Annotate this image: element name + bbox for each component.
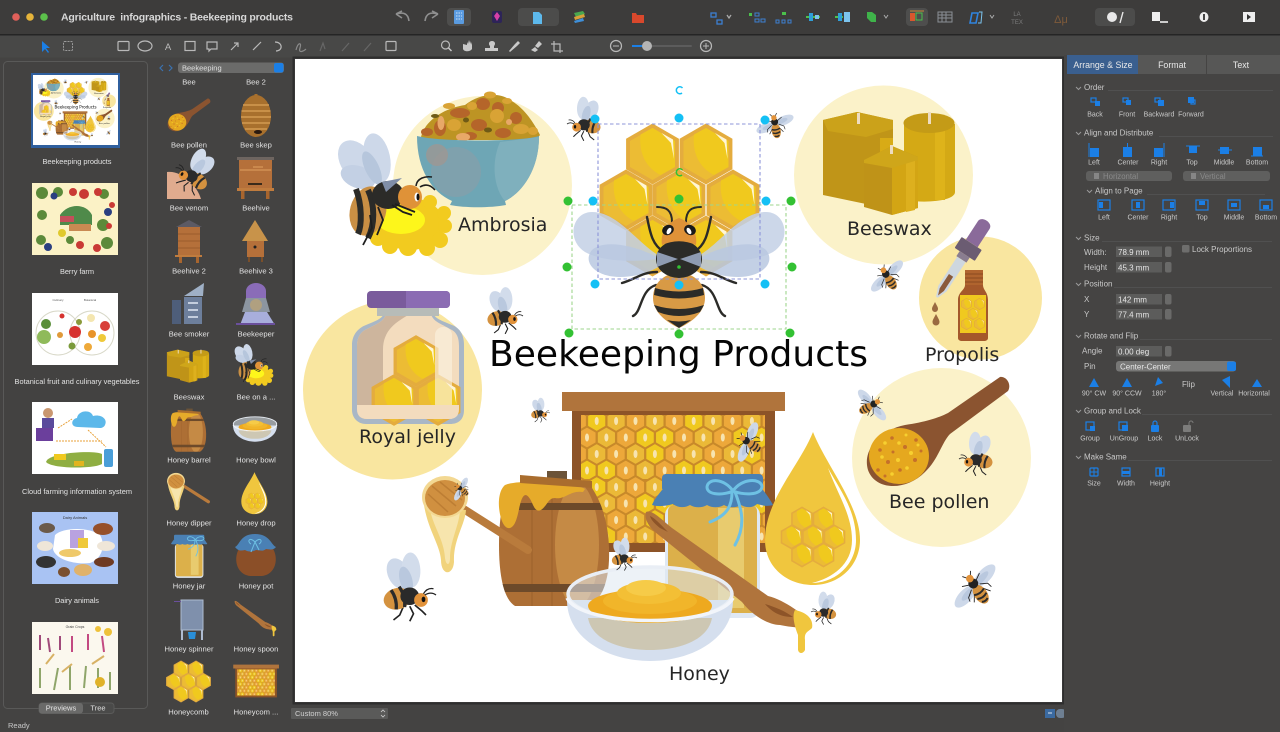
- section: size: 45.3 mm: [1118, 264, 1149, 272]
- library item: honeycomb: [166, 660, 211, 716]
- traffic lights: [12, 13, 48, 21]
- section: position: X: [1084, 295, 1090, 304]
- section: align to page: Middle: [1224, 214, 1244, 222]
- honey jar: [652, 474, 773, 618]
- library item: bee pollen: [168, 98, 210, 150]
- bee: bottom right: [943, 557, 1011, 619]
- section: size: Width:: [1084, 248, 1107, 257]
- label: propolis: Propolis: [925, 344, 999, 366]
- library item: bee on a flower: Bee on a ...: [237, 392, 275, 402]
- section: align and distribute: Vertical: [1200, 172, 1226, 181]
- section: position: Y: [1084, 310, 1090, 319]
- library item: beeswax: Beeswax: [174, 392, 205, 402]
- canvas page: [295, 59, 1062, 702]
- library item: honey spoon: [234, 601, 278, 654]
- library item: honey jar: Honey jar: [173, 582, 206, 590]
- label: honey: Honey: [669, 663, 730, 685]
- previews and tree tabs: Previews: [46, 704, 76, 712]
- section: rotate and flip: 180°: [1152, 390, 1166, 398]
- preview: botanical fruit: Culinary: [52, 298, 64, 302]
- section: align to page: Right: [1161, 214, 1177, 222]
- library item: bee venom: [167, 141, 222, 212]
- honey barrel: [495, 471, 615, 607]
- body: [344, 177, 435, 245]
- section: size: 78.9 mm: [1118, 248, 1149, 257]
- section: position: 77.4 mm: [1118, 310, 1149, 320]
- previews and tree tabs: [39, 703, 114, 714]
- propolis dropper: [927, 214, 997, 304]
- preview: cloud farming: [22, 402, 132, 496]
- section: align to page: Left: [1098, 214, 1110, 222]
- section: order: Order: [1084, 83, 1105, 92]
- section: rotate and flip: Center-Center: [1120, 362, 1171, 371]
- library item: honeycomb: Honeycomb: [168, 708, 209, 716]
- library item: bee smoker: [169, 283, 210, 338]
- library item: honey drop: Honey drop: [236, 518, 276, 528]
- shape tools: A: [165, 42, 172, 53]
- honey bowl: [567, 567, 733, 661]
- circle: ambrosia: [393, 96, 572, 275]
- big honeycomb: [600, 124, 759, 276]
- section: make same: Width: [1117, 480, 1135, 488]
- preview: beekeeping products: [31, 73, 120, 166]
- circle: royal jelly: [303, 300, 482, 480]
- bee: near spoon: [811, 591, 837, 625]
- bee: above pollen circle: [849, 382, 891, 430]
- circle: beeswax: [794, 86, 973, 264]
- library item: bee smoker: Bee smoker: [169, 330, 210, 338]
- toolbar icons: layers, grid, link, latex, formula: LA: [1013, 12, 1021, 18]
- propolis bottle: [958, 270, 988, 341]
- section: position: [1076, 280, 1272, 320]
- library item: bee venom: Bee venom: [170, 204, 208, 212]
- section: rotate and flip: Horizontal: [1238, 390, 1270, 398]
- section: align to page: Top: [1196, 214, 1208, 222]
- bee: over bowl: [611, 537, 637, 571]
- bee: on dipper: [447, 475, 476, 505]
- section: rotate and flip: Vertical: [1211, 390, 1234, 398]
- view tools: [442, 40, 563, 53]
- bee on a flower: [330, 131, 452, 256]
- label: beeswax: Beeswax: [847, 218, 932, 240]
- toolbar icons: layers, grid, link, latex, formula: TEX: [1011, 20, 1023, 26]
- toolbar icons: layers, grid, link, latex, formula: Δμ: [1054, 14, 1068, 26]
- library header: Beekeeping: [182, 64, 222, 72]
- queen bee: [573, 207, 785, 328]
- green selection box: [572, 205, 786, 329]
- section: align and distribute: [1076, 128, 1273, 181]
- section: make same: [1076, 452, 1272, 488]
- section: align and distribute: Top: [1186, 160, 1198, 166]
- library item: beehive 3: Beehive 3: [239, 266, 273, 276]
- bee: on honeycomb frame: [726, 418, 773, 469]
- green handles: [562, 194, 796, 338]
- zoom selector: Custom 80%: [295, 709, 338, 718]
- section: group and lock: Lock: [1148, 436, 1163, 442]
- preview: grain crops: Grain Crops: [66, 625, 85, 629]
- section: make same: Make Same: [1084, 452, 1127, 462]
- library item: honey barrel: Honey barrel: [167, 456, 211, 464]
- circle: propolis: [919, 236, 1042, 360]
- section: rotate and flip: 90° CCW: [1112, 390, 1142, 398]
- preview: dairy animals: Dairy Animals: [63, 515, 87, 520]
- blue selection box: [598, 124, 760, 279]
- tabs: Arrange & Size: [1073, 60, 1133, 70]
- library header: Bee 2: [246, 78, 266, 86]
- previews and tree tabs: Tree: [90, 704, 106, 712]
- library item: honey spoon: Honey spoon: [234, 644, 278, 654]
- canvas border: [294, 58, 1064, 704]
- library item: beehive 3: [239, 220, 273, 276]
- section: align to page: Center: [1127, 214, 1149, 222]
- bee: top centre right: [753, 110, 798, 142]
- section: align and distribute: Center: [1117, 160, 1139, 166]
- section: align to page: Align to Page: [1095, 186, 1143, 196]
- bee: bottom left: [381, 552, 436, 621]
- bee: in pollen circle: [959, 432, 994, 476]
- cyan handles: [588, 114, 770, 290]
- beeswax candles: [823, 112, 955, 215]
- section: group and lock: Group and Lock: [1084, 406, 1142, 416]
- section: align to page: Bottom: [1255, 214, 1277, 222]
- section: rotate and flip: Flip: [1182, 380, 1195, 389]
- selection handles: [562, 87, 796, 338]
- status text: Ready: [8, 721, 30, 730]
- library header: [160, 62, 284, 86]
- preview: botanical fruit: Botanical fruit and culinary vegetables: [14, 377, 140, 386]
- library header: Bee: [182, 78, 196, 86]
- section: align and distribute: Left: [1088, 160, 1100, 166]
- tabs: [1067, 55, 1280, 74]
- panel: shape library: [160, 62, 284, 716]
- library item: beehive 2: Beehive 2: [172, 266, 206, 276]
- circle: bee pollen: [852, 368, 1031, 547]
- library item: beekeeper: [236, 283, 275, 338]
- page controls: [1045, 709, 1066, 718]
- preview: dairy animals: Dairy animals: [55, 596, 99, 605]
- section: order: Front: [1119, 112, 1135, 118]
- tabs: Format: [1158, 60, 1186, 70]
- bee wings: [573, 212, 666, 277]
- section: align and distribute: Align and Distribute: [1084, 128, 1154, 138]
- library item: bee skep: Bee skep: [240, 140, 272, 150]
- bee: near royal jelly: [486, 287, 523, 334]
- library item: honey bowl: Honey bowl: [236, 456, 276, 464]
- bee: top centre left: [567, 97, 602, 141]
- library item: honey dipper: Honey dipper: [166, 518, 212, 528]
- section: make same: Height: [1150, 480, 1170, 488]
- honey dipper: [422, 476, 528, 572]
- library item: beehive: Beehive: [242, 204, 270, 212]
- bee legs: [622, 207, 736, 316]
- section: align and distribute: Middle: [1214, 160, 1234, 166]
- infographic artwork: [303, 86, 1042, 685]
- section: size: Size: [1084, 234, 1100, 242]
- drawing toolbar: [0, 36, 1280, 58]
- pointer tools: [42, 41, 72, 53]
- section: group and lock: UnLock: [1175, 436, 1199, 442]
- section: group and lock: [1076, 406, 1272, 442]
- section: rotate and flip: Pin: [1084, 362, 1096, 371]
- section: rotate and flip: 90° CW: [1082, 390, 1106, 398]
- section: group and lock: UnGroup: [1110, 436, 1138, 442]
- zoom selector: [291, 708, 388, 719]
- section: size: Height: [1084, 263, 1108, 272]
- section: order: Back: [1087, 112, 1103, 118]
- library item: honey dipper: [166, 473, 212, 528]
- toolbar icons: layers, grid, link, latex, formula: [906, 8, 1068, 26]
- zoom slider: [610, 40, 712, 52]
- preview: cloud farming: Cloud farming information system: [22, 487, 132, 496]
- library item: honeycomb frame: Honeycom ...: [234, 708, 278, 716]
- honey spoon: [645, 511, 812, 653]
- preview: berry farm: [32, 183, 118, 276]
- section: size: Lock Proportions: [1192, 245, 1252, 254]
- bee abdomen: [653, 273, 705, 328]
- section: align and distribute: Bottom: [1246, 160, 1268, 166]
- library item: honey spinner: [165, 600, 214, 654]
- library item: bee skep: [240, 94, 272, 150]
- section: size: [1076, 234, 1272, 272]
- library item: honey barrel: [167, 409, 211, 464]
- section: position: Position: [1084, 280, 1112, 288]
- ambrosia bowl: [417, 92, 540, 207]
- propolis drops: [932, 302, 940, 326]
- section: align to page: [1087, 186, 1277, 222]
- section: make same: Size: [1087, 480, 1101, 488]
- section: align and distribute: Right: [1151, 160, 1167, 166]
- section: order: [1076, 83, 1273, 118]
- library item: bee on a flower: [232, 343, 275, 402]
- section: rotate and flip: Angle: [1082, 346, 1103, 356]
- library item: honey jar: [171, 535, 207, 590]
- label: ambrosia: Ambrosia: [458, 214, 547, 236]
- wings: [330, 131, 395, 193]
- bee head: [662, 218, 696, 245]
- preview: botanical fruit: Botanical: [84, 298, 97, 302]
- preview: dairy animals: [32, 512, 118, 605]
- library item: bee pollen: Bee pollen: [171, 140, 207, 150]
- royal jelly jar: [352, 291, 464, 426]
- label: bee pollen: Bee pollen: [889, 491, 989, 513]
- section: group and lock: Group: [1080, 436, 1100, 442]
- section: order: Backward: [1144, 112, 1174, 118]
- title: Beekeeping Products: [489, 334, 868, 375]
- section: rotate and flip: Rotate and Flip: [1084, 332, 1139, 340]
- library item: honey drop: [236, 472, 276, 528]
- panel: document previews: [4, 62, 148, 714]
- bee: between beeswax and propolis: [863, 255, 914, 301]
- library item: honey bowl: [233, 417, 277, 464]
- library item: beeswax: [167, 350, 209, 402]
- rotation handles: [676, 87, 682, 176]
- preview: beekeeping products: Beekeeping products: [42, 157, 112, 166]
- toolbar icons: undo and redo: [396, 11, 438, 21]
- bee: small, above barrel: [530, 398, 550, 422]
- section: rotate and flip: [1076, 332, 1272, 398]
- preview: berry farm: Berry farm: [60, 267, 94, 276]
- document title: Agriculture infographics - Beekeeping products: [61, 12, 293, 24]
- library item: beehive 2: [172, 220, 206, 276]
- library item: beehive: [237, 157, 274, 212]
- preview: botanical fruit: [14, 293, 140, 386]
- library item: honey pot: [235, 534, 276, 590]
- toolbar icons: arrange and connect: [711, 12, 888, 24]
- library item: honey spinner: Honey spinner: [165, 644, 214, 654]
- toolbar icons: format, snap, info, presentation: [1095, 8, 1255, 26]
- honeycomb frame: [562, 392, 785, 552]
- label: royal jelly: Royal jelly: [359, 426, 456, 448]
- flower: [369, 195, 452, 256]
- section: order: Forward: [1178, 112, 1204, 118]
- bee pollen spoon: [867, 377, 1009, 486]
- honey drop: [765, 432, 860, 585]
- section: rotate and flip: 0.00 deg: [1118, 348, 1149, 356]
- top title bar: [0, 0, 1280, 36]
- preview: grain crops: [32, 622, 118, 694]
- shape tools: [118, 41, 396, 53]
- toolbar icons: view and library buttons: [447, 8, 644, 26]
- section: align and distribute: Horizontal: [1103, 172, 1138, 181]
- tabs: Text: [1233, 60, 1250, 70]
- section: position: 142 mm: [1118, 296, 1147, 304]
- panel: arrange and size: [1064, 55, 1280, 732]
- library item: honey pot: Honey pot: [239, 582, 274, 590]
- bee thorax: [656, 240, 702, 278]
- library item: beekeeper: Beekeeper: [238, 330, 275, 338]
- library item: honeycomb frame: [233, 665, 279, 716]
